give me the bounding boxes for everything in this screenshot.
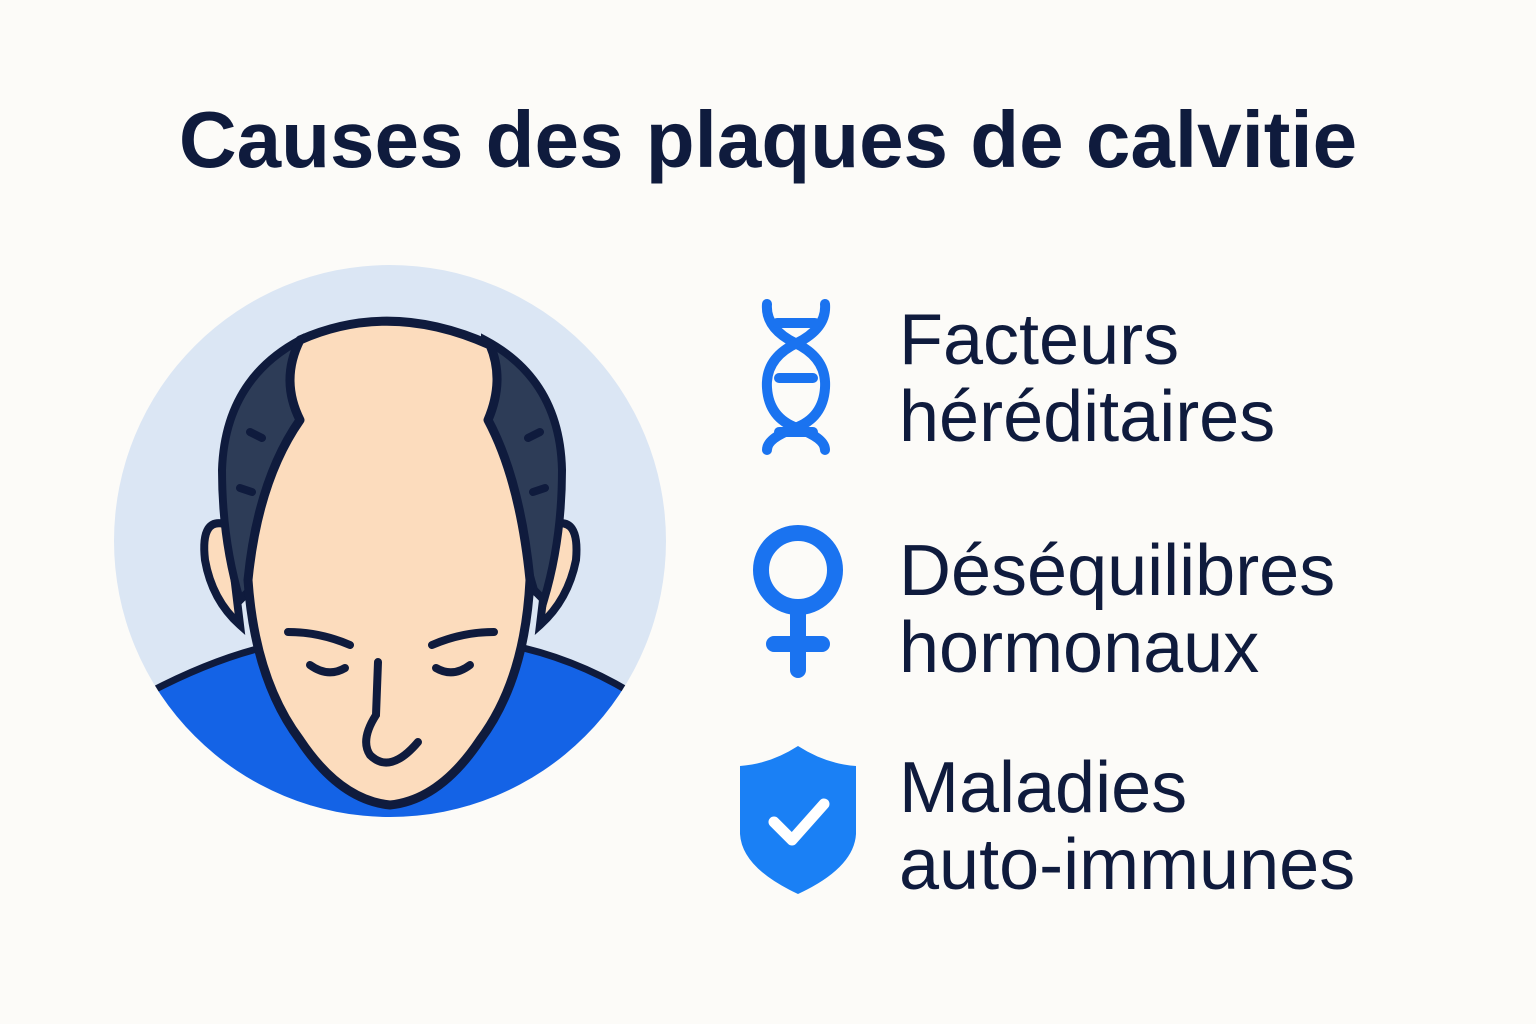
- icon: shield: [740, 746, 856, 894]
- circle background: [114, 265, 666, 817]
- face: [248, 321, 530, 805]
- ears: [204, 523, 240, 625]
- hair sides: [222, 340, 300, 600]
- text: hereditary: héréditaires: [899, 377, 1275, 457]
- text: autoimmune: [899, 748, 1355, 905]
- text: autoimmune: auto-immunes: [899, 825, 1355, 905]
- text: hereditary: Facteurs: [899, 300, 1179, 380]
- features: [240, 432, 545, 763]
- text: autoimmune: Maladies: [899, 748, 1187, 828]
- text: hormonal: [899, 531, 1335, 688]
- illustration: bald man: [114, 265, 666, 817]
- text: hormonal: Déséquilibres: [899, 531, 1335, 611]
- text: hormonal: hormonaux: [899, 608, 1259, 688]
- text: hereditary: [899, 300, 1275, 457]
- title: Causes des plaques de calvitie: [179, 95, 1357, 184]
- icon: DNA: [762, 299, 830, 455]
- icon: female symbol: [753, 525, 843, 678]
